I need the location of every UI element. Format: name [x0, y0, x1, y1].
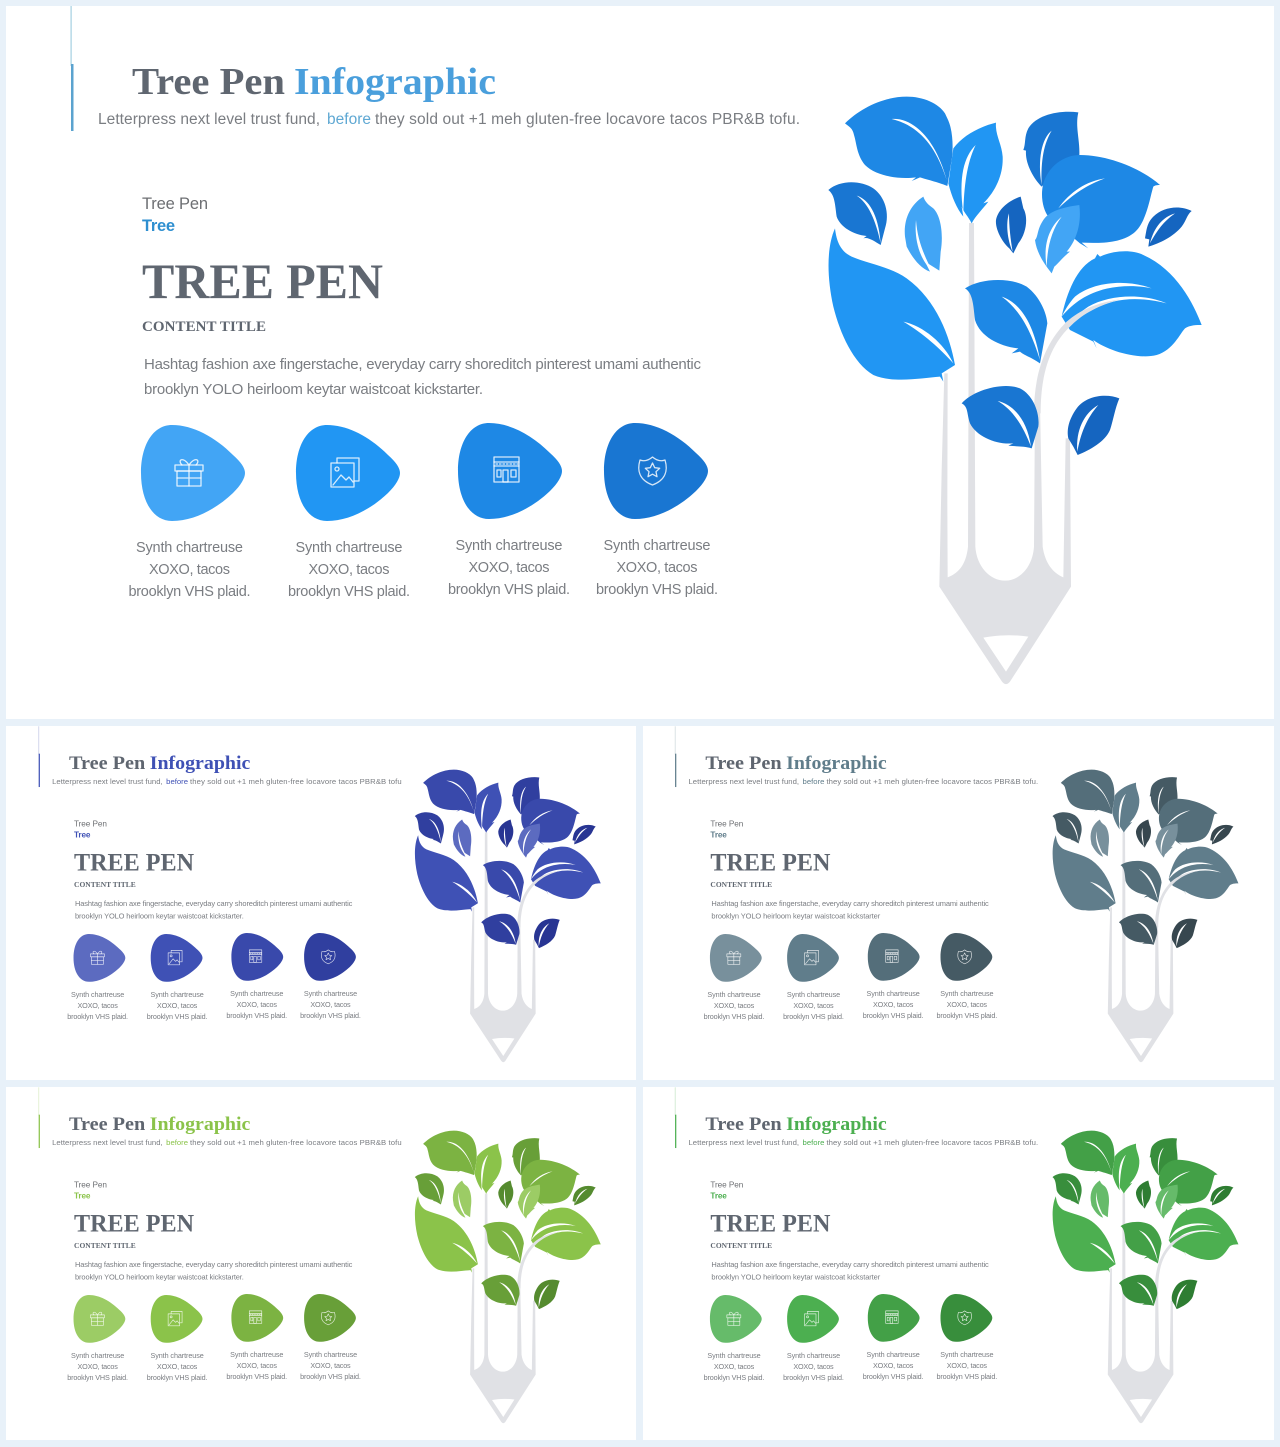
- caption 2: brooklyn VHS plaid.: [288, 584, 410, 600]
- leaf: big left: [829, 228, 955, 382]
- caption 1: XOXO, tacos: [149, 562, 230, 578]
- title: [69, 753, 250, 774]
- caption 4: XOXO, tacos: [616, 560, 698, 576]
- title: [705, 753, 887, 774]
- captions: brooklyn VHS plaid.: [147, 1012, 207, 1021]
- captions: Synth chartreuse: [230, 1350, 283, 1359]
- icon badge: storefront: [458, 423, 562, 519]
- leaf: lower middle: [962, 386, 1039, 448]
- captions: XOXO, tacos: [310, 1000, 351, 1009]
- captions: XOXO, tacos: [78, 1362, 118, 1371]
- caption 1: [128, 540, 250, 600]
- leaf: small right: [1145, 208, 1192, 247]
- captions: Synth chartreuse: [230, 989, 283, 998]
- kicker: [710, 1180, 744, 1200]
- kicker: Tree: [74, 830, 91, 839]
- captions: XOXO, tacos: [873, 1361, 914, 1370]
- captions: Synth chartreuse: [71, 990, 124, 999]
- captions: XOXO, tacos: [78, 1001, 118, 1010]
- leaf: light mid left: [905, 197, 942, 272]
- content title: CONTENT TITLE: [710, 1241, 772, 1250]
- pencil: [939, 223, 1071, 684]
- content title: CONTENT TITLE: [74, 1241, 136, 1250]
- captions: Synth chartreuse: [71, 1351, 124, 1360]
- caption 1: brooklyn VHS plaid.: [128, 584, 250, 600]
- captions: brooklyn VHS plaid.: [783, 1373, 844, 1382]
- captions: brooklyn VHS plaid.: [300, 1372, 361, 1381]
- title: Infographic: [786, 753, 887, 774]
- title: Infographic: [294, 61, 496, 103]
- subtitle: Letterpress next level trust fund,: [98, 111, 320, 128]
- captions: XOXO, tacos: [157, 1001, 198, 1010]
- captions: brooklyn VHS plaid.: [226, 1372, 287, 1381]
- title: [69, 1114, 250, 1135]
- captions: Synth chartreuse: [707, 990, 761, 999]
- accent line: [675, 1087, 676, 1148]
- captions: brooklyn VHS plaid.: [704, 1012, 764, 1021]
- illustration: tree growing from pencil: [828, 97, 1202, 684]
- kicker: Tree Pen: [74, 1180, 107, 1189]
- body text: Hashtag fashion axe fingerstache, everyday carry shoreditch pinterest umami authentic: [144, 356, 702, 373]
- illustration: tree pen: [1053, 770, 1238, 1062]
- body text: [144, 356, 702, 398]
- captions: brooklyn VHS plaid.: [226, 1011, 287, 1020]
- illustration: tree pen: [415, 770, 601, 1062]
- kicker: Tree Pen: [74, 819, 107, 828]
- illustration: tree pen: [415, 1131, 601, 1423]
- body text: [711, 1260, 989, 1282]
- leaf: upper right large: [1042, 155, 1160, 248]
- icon badges: [710, 1294, 992, 1343]
- captions: brooklyn VHS plaid.: [863, 1011, 924, 1020]
- caption 3: XOXO, tacos: [468, 560, 550, 576]
- captions: [704, 1350, 997, 1382]
- leaf: top centre: [948, 123, 1003, 223]
- kicker: Tree Pen: [710, 819, 744, 828]
- caption 4: [596, 538, 718, 598]
- captions: Synth chartreuse: [707, 1351, 761, 1360]
- kicker: [74, 1180, 107, 1200]
- captions: Synth chartreuse: [150, 1351, 204, 1360]
- panel: slate slide: [643, 726, 1274, 1080]
- subtitle: [689, 777, 1038, 786]
- caption 3: [448, 538, 570, 598]
- heading: TREE PEN: [710, 1211, 830, 1238]
- kicker: Tree: [142, 217, 175, 235]
- title: Tree Pen: [69, 1114, 146, 1135]
- body text: [75, 1260, 353, 1282]
- kicker: Tree Pen: [142, 195, 208, 213]
- caption 3: Synth chartreuse: [456, 538, 562, 554]
- subtitle: they sold out +1 meh gluten-free locavore tacos PBR&B tofu: [190, 1138, 402, 1147]
- panel: lime slide: [6, 1087, 636, 1440]
- captions: XOXO, tacos: [947, 1361, 987, 1370]
- captions: Synth chartreuse: [304, 1350, 357, 1359]
- heading: TREE PEN: [710, 850, 830, 877]
- subtitle: [689, 1138, 1038, 1147]
- subtitle: [52, 1138, 402, 1147]
- accent line: [675, 726, 676, 787]
- caption 4: brooklyn VHS plaid.: [596, 582, 718, 598]
- captions: Synth chartreuse: [787, 1351, 840, 1360]
- body text: [711, 899, 989, 921]
- panel: green slide: [643, 1087, 1274, 1440]
- body text: Hashtag fashion axe fingerstache, everyday carry shoreditch pinterest umami authentic: [75, 899, 353, 908]
- captions: brooklyn VHS plaid.: [147, 1373, 207, 1382]
- body text: brooklyn YOLO heirloom keytar waistcoat kickstarter.: [75, 1273, 244, 1282]
- body text: Hashtag fashion axe fingerstache, everyday carry shoreditch pinterest umami authentic: [711, 1260, 989, 1269]
- captions: XOXO, tacos: [873, 1000, 914, 1009]
- captions: Synth chartreuse: [940, 989, 994, 998]
- captions: XOXO, tacos: [714, 1001, 755, 1010]
- title: Tree Pen: [69, 753, 146, 774]
- captions: Synth chartreuse: [787, 990, 840, 999]
- caption 2: Synth chartreuse: [296, 540, 402, 556]
- icon badge: shield star: [604, 423, 708, 519]
- subtitle: they sold out +1 meh gluten-free locavore tacos PBR&B tofu: [190, 777, 402, 786]
- panel: main blue slide: [6, 6, 1274, 719]
- leaf: lower right: [1068, 396, 1119, 455]
- subtitle: they sold out +1 meh gluten-free locavore tacos PBR&B tofu.: [375, 111, 800, 128]
- subtitle: Letterpress next level trust fund,: [689, 777, 799, 786]
- title: Tree Pen: [705, 753, 782, 774]
- icon badge: gift: [141, 425, 245, 521]
- accent line: [38, 1087, 40, 1148]
- icon badges: [74, 933, 356, 982]
- body text: brooklyn YOLO heirloom keytar waistcoat kickstarter: [711, 1273, 881, 1282]
- icon badge: pictures: [296, 425, 400, 521]
- title: Infographic: [150, 753, 250, 774]
- title: Infographic: [786, 1114, 887, 1135]
- subtitle: before: [803, 1138, 824, 1147]
- subtitle: before: [803, 777, 824, 786]
- captions: Synth chartreuse: [867, 1350, 920, 1359]
- captions: brooklyn VHS plaid.: [704, 1373, 764, 1382]
- caption 1: Synth chartreuse: [136, 540, 243, 556]
- subtitle: Letterpress next level trust fund,: [52, 777, 163, 786]
- heading: TREE PEN: [74, 850, 194, 877]
- captions: Synth chartreuse: [304, 989, 357, 998]
- heading: TREE PEN: [74, 1211, 194, 1238]
- title: Tree Pen: [705, 1114, 782, 1135]
- captions: XOXO, tacos: [793, 1001, 834, 1010]
- title: [705, 1114, 887, 1135]
- content title: CONTENT TITLE: [710, 880, 772, 889]
- heading: TREE PEN: [142, 253, 383, 309]
- caption 2: XOXO, tacos: [308, 562, 390, 578]
- title: Tree Pen: [132, 61, 285, 103]
- kicker: Tree: [710, 830, 727, 839]
- leaf: top right back: [1023, 112, 1079, 187]
- subtitle: they sold out +1 meh gluten-free locavore tacos PBR&B tofu.: [826, 777, 1038, 786]
- kicker: Tree Pen: [710, 1180, 744, 1189]
- captions: [704, 989, 997, 1021]
- illustration: tree pen: [1053, 1131, 1238, 1423]
- captions: brooklyn VHS plaid.: [67, 1373, 128, 1382]
- subtitle: [98, 111, 800, 128]
- caption 4: Synth chartreuse: [604, 538, 710, 554]
- subtitle: they sold out +1 meh gluten-free locavore tacos PBR&B tofu.: [826, 1138, 1038, 1147]
- captions: XOXO, tacos: [714, 1362, 755, 1371]
- kicker: [142, 195, 208, 235]
- captions: brooklyn VHS plaid.: [937, 1011, 997, 1020]
- captions: brooklyn VHS plaid.: [300, 1011, 361, 1020]
- leaf: big right: [1062, 251, 1202, 356]
- title: Infographic: [150, 1114, 250, 1135]
- branch: curved stem: [1034, 299, 1120, 413]
- caption 2: [288, 540, 410, 600]
- body text: brooklyn YOLO heirloom keytar waistcoat kickstarter.: [144, 381, 483, 398]
- captions: brooklyn VHS plaid.: [863, 1372, 924, 1381]
- kicker: [74, 819, 107, 839]
- icon badges: [74, 1294, 356, 1343]
- captions: XOXO, tacos: [237, 1000, 277, 1009]
- panel: purple slide: [6, 726, 636, 1080]
- leaf: small centre: [996, 197, 1026, 253]
- captions: Synth chartreuse: [940, 1350, 994, 1359]
- captions: XOXO, tacos: [793, 1362, 834, 1371]
- subtitle: Letterpress next level trust fund,: [52, 1138, 163, 1147]
- kicker: Tree: [74, 1191, 91, 1200]
- accent line: [70, 6, 74, 131]
- captions: Synth chartreuse: [150, 990, 204, 999]
- captions: XOXO, tacos: [237, 1361, 277, 1370]
- subtitle: before: [166, 1138, 188, 1147]
- accent line: [38, 726, 40, 787]
- captions: [67, 1350, 361, 1382]
- leaf: middle: [965, 280, 1047, 363]
- subtitle: Letterpress next level trust fund,: [689, 1138, 799, 1147]
- subtitle: before: [327, 111, 371, 128]
- leaf: light overlap: [1035, 205, 1080, 273]
- body text: [75, 899, 353, 921]
- captions: Synth chartreuse: [867, 989, 920, 998]
- kicker: [710, 819, 744, 839]
- leaf: small left: [828, 182, 887, 245]
- kicker: Tree: [710, 1191, 727, 1200]
- captions: XOXO, tacos: [157, 1362, 198, 1371]
- subtitle: before: [166, 777, 188, 786]
- captions: [67, 989, 361, 1021]
- caption 3: brooklyn VHS plaid.: [448, 582, 570, 598]
- captions: XOXO, tacos: [947, 1000, 987, 1009]
- subtitle: [52, 777, 402, 786]
- content title: CONTENT TITLE: [142, 319, 266, 335]
- icon badges: [710, 933, 992, 982]
- title: [132, 61, 496, 103]
- captions: brooklyn VHS plaid.: [937, 1372, 997, 1381]
- leaf: top left: [845, 97, 953, 186]
- captions: XOXO, tacos: [310, 1361, 351, 1370]
- captions: brooklyn VHS plaid.: [67, 1012, 128, 1021]
- content title: CONTENT TITLE: [74, 880, 136, 889]
- captions: brooklyn VHS plaid.: [783, 1012, 844, 1021]
- body text: Hashtag fashion axe fingerstache, everyday carry shoreditch pinterest umami authentic: [711, 899, 989, 908]
- body text: brooklyn YOLO heirloom keytar waistcoat kickstarter: [711, 912, 881, 921]
- body text: Hashtag fashion axe fingerstache, everyday carry shoreditch pinterest umami authentic: [75, 1260, 353, 1269]
- body text: brooklyn YOLO heirloom keytar waistcoat kickstarter.: [75, 912, 244, 921]
